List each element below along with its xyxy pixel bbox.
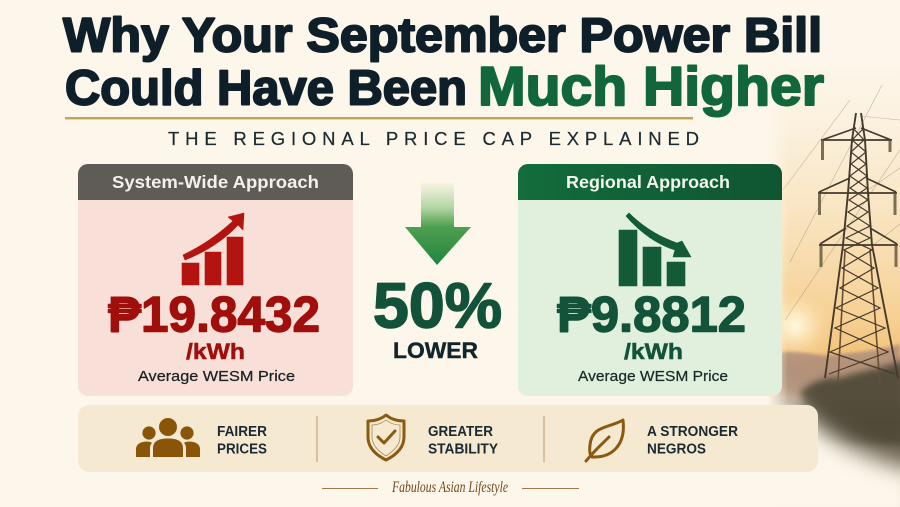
- benefit: fairer prices: [136, 418, 267, 458]
- label: PRICES: [217, 442, 267, 458]
- fade to background: [730, 400, 900, 507]
- tower: [818, 113, 898, 385]
- subtitle: THE REGIONAL PRICE CAP EXPLAINED: [168, 128, 699, 149]
- benefits band: [78, 405, 818, 472]
- tree line: [800, 360, 900, 445]
- signature: Fabulous Asian Lifestyle: [391, 479, 508, 496]
- icon: leaf: [586, 420, 623, 461]
- header label: Regional Approach: [566, 172, 730, 192]
- title line 1: Why Your September Power Bill: [63, 10, 822, 62]
- center callout: 50% lower: [373, 182, 502, 363]
- benefit: greater stability: [368, 415, 498, 460]
- label: [217, 424, 267, 458]
- title line 2 highlight: Much Higher: [478, 55, 824, 117]
- label: [647, 424, 738, 458]
- icon: rising bars: [182, 213, 244, 285]
- gold rule: [65, 117, 693, 119]
- insulators: [820, 141, 896, 267]
- power lines: [783, 85, 900, 320]
- benefit: a stronger negros: [586, 420, 738, 461]
- lower label: LOWER: [393, 338, 478, 363]
- panel header: [518, 164, 782, 200]
- price: ₱9.8812: [557, 286, 746, 342]
- panel header: [78, 164, 353, 200]
- label: [428, 424, 498, 458]
- price: ₱19.8432: [108, 286, 320, 342]
- icon: shield: [368, 415, 404, 460]
- band background: [78, 405, 818, 472]
- panel body: [518, 164, 782, 396]
- caption: Average WESM Price: [578, 368, 728, 385]
- label: STABILITY: [428, 442, 498, 458]
- caption: Average WESM Price: [138, 368, 295, 385]
- photo: transmission tower at sunset: [770, 84, 900, 486]
- arrow: down: [405, 182, 471, 265]
- title: [63, 10, 824, 117]
- icon: people: [136, 418, 200, 457]
- unit: /kWh: [186, 339, 245, 364]
- panel body: [78, 164, 353, 396]
- label: FAIRER: [217, 424, 267, 440]
- label: A STRONGER: [647, 424, 738, 440]
- unit: /kWh: [624, 339, 683, 364]
- panel: system-wide approach: [78, 164, 353, 396]
- panel: regional approach: [518, 164, 782, 396]
- label: GREATER: [428, 424, 493, 440]
- percentage: 50%: [373, 270, 502, 342]
- icon: falling bars: [619, 213, 691, 286]
- title line 2 dark: Could Have Been: [65, 62, 467, 116]
- header label: System-Wide Approach: [112, 172, 319, 192]
- label: NEGROS: [647, 442, 706, 458]
- hills: [770, 344, 900, 400]
